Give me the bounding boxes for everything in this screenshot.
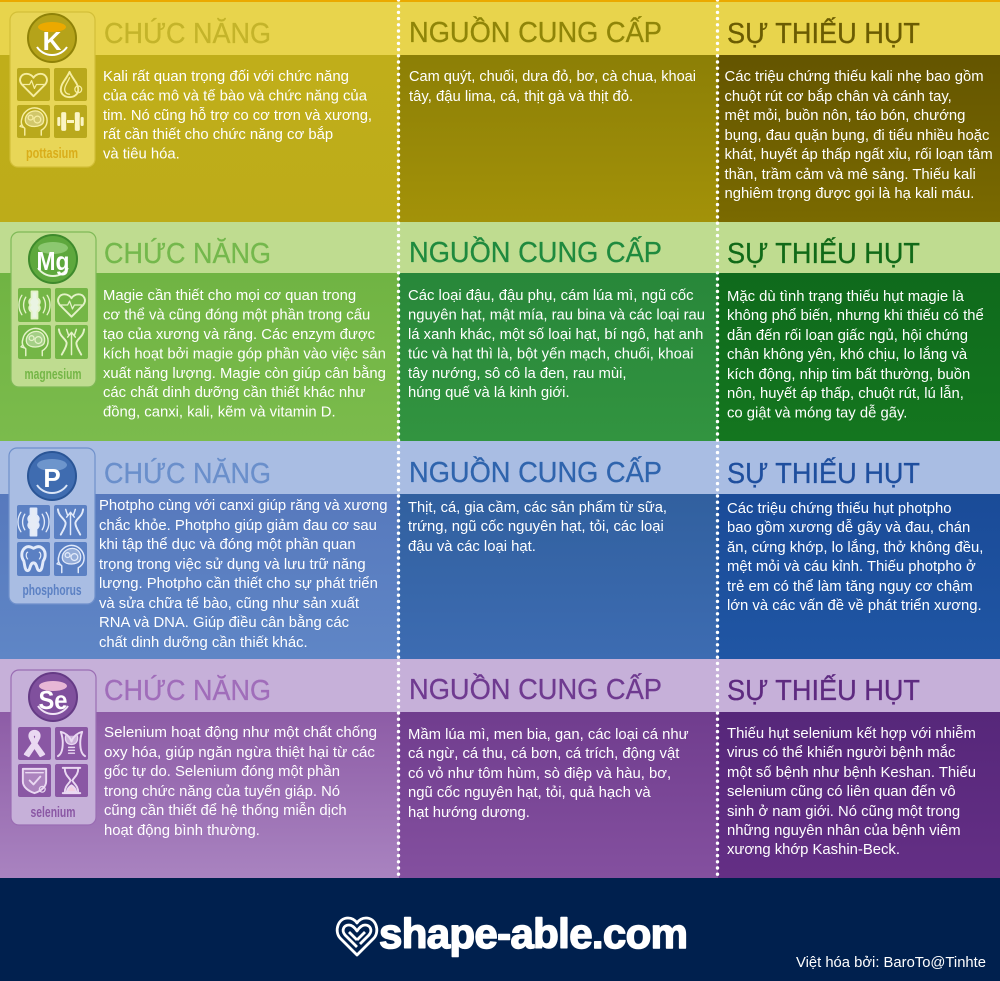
panel: magnesium row background <box>0 222 1000 441</box>
text block: phosphorus deficiency: Các triệu chứng thiếu hụt photpho <box>727 501 952 517</box>
icon: brain <box>17 105 50 138</box>
icon: drop <box>54 68 87 101</box>
footer band <box>0 878 1000 981</box>
text block: phosphorus function <box>99 498 388 651</box>
label: selenium: selenium <box>30 805 76 821</box>
text block: magnesium deficiency <box>727 289 984 422</box>
text block: magnesium deficiency: không phổ biến, nhưng khi thiếu có thể <box>727 308 984 324</box>
text block: potassium deficiency: khát, huyết áp thấp ngất xỉu, rối loạn tâm <box>724 147 993 163</box>
text block: selenium sources: hạt hướng dương. <box>408 805 530 821</box>
text block: phosphorus deficiency: trẻ em có thể làm tăng nguy cơ chậm <box>727 579 973 595</box>
icon: shape-able heart logo <box>337 918 377 955</box>
text block: selenium deficiency: selenium cũng có liên quan đến vô <box>727 784 956 800</box>
text block: magnesium function: xuất năng lượng. Magie còn giúp cân bằng <box>103 365 386 382</box>
text block: selenium deficiency: một số bệnh như bệnh Keshan. Thiếu <box>727 765 976 781</box>
icon: dumbbell <box>54 105 87 138</box>
text block: phosphorus function: chất dinh dưỡng cần thiết khác. <box>99 635 308 651</box>
panel: selenium row background <box>0 659 1000 878</box>
heading: selenium function: CHỨC NĂNG <box>104 674 271 707</box>
text block: phosphorus function: chắc khỏe. Photpho giúp giảm đau cơ sau <box>99 517 377 534</box>
text block: phosphorus function: trọng trong việc sử dụng và lưu trữ năng <box>99 557 366 573</box>
heading: magnesium deficiency: SỰ THIẾU HỤT <box>727 236 920 270</box>
text block: selenium function: oxy hóa, giúp ngăn ngừa thiệt hại từ các <box>104 745 376 761</box>
heading: selenium sources: NGUỒN CUNG CẤP <box>409 672 662 706</box>
text block: selenium sources: Mầm lúa mì, men bia, gan, các loại cá như <box>408 727 689 743</box>
text block: selenium deficiency: những nguyên nhân của bệnh viêm <box>727 823 961 839</box>
text block: potassium deficiency: chuột rút cơ bắp chân và cánh tay, <box>724 88 952 105</box>
text block: magnesium function: tạo của xương và răng. Các enzym được <box>103 327 376 343</box>
panel: phosphorus badge <box>9 448 95 604</box>
label: pottasium: pottasium <box>26 146 78 162</box>
icon: Se element circle <box>29 673 77 721</box>
heading: magnesium sources: NGUỒN CUNG CẤP <box>409 235 662 269</box>
text block: phosphorus function: khi tập thể dục và đóng một phần quan <box>99 537 356 553</box>
text block: phosphorus function: lượng. Photpho cần thiết cho sự phát triển <box>99 576 378 592</box>
text block: magnesium deficiency: Mặc dù tình trạng thiếu hụt magie là <box>727 289 965 305</box>
heading: potassium deficiency: SỰ THIẾU HỤT <box>727 16 920 50</box>
text block: selenium function: hoạt động bình thường. <box>104 823 260 839</box>
text block: magnesium function: Magie cần thiết cho mọi cơ quan trong <box>103 288 356 304</box>
icon: heart <box>55 288 88 322</box>
text block: potassium sources <box>409 69 696 105</box>
text block: potassium deficiency: nghiêm trọng được gọi là hạ kali máu. <box>724 186 974 202</box>
logo wordmark: shape-able.com <box>379 910 688 957</box>
icon: intestines <box>55 325 88 359</box>
icon: P element circle <box>28 452 76 500</box>
icon: P element circle: P <box>43 463 61 493</box>
icon: joint <box>18 288 51 322</box>
panel: phosphorus row background <box>0 441 1000 659</box>
text block: magnesium deficiency: chân không yên, khó chịu, lo lắng và <box>727 346 968 363</box>
text block: phosphorus sources: đậu và các loại hạt. <box>408 539 536 555</box>
heading: selenium deficiency: SỰ THIẾU HỤT <box>727 673 920 707</box>
icon: tooth <box>17 542 50 576</box>
text block: magnesium sources: húng quế và lá kinh giới. <box>408 385 570 401</box>
text block: magnesium sources: nguyên hạt, mật mía, rau bina và các loại rau <box>408 308 705 324</box>
text block: phosphorus deficiency: bao gồm xương dễ gãy và đau, chán <box>727 519 970 536</box>
text block: potassium deficiency: thần, trầm cảm và mê sảng. Thiếu kali <box>724 167 976 183</box>
text block: magnesium deficiency: dẫn đến rối loạn giấc ngủ, hội chứng <box>727 327 968 344</box>
icon: Se element circle: Se <box>38 685 68 715</box>
text block: magnesium sources: Các loại đậu, đậu phụ, cám lúa mì, ngũ cốc <box>408 288 694 304</box>
text block: potassium function <box>103 69 372 162</box>
heading: phosphorus deficiency: SỰ THIẾU HỤT <box>727 456 920 490</box>
text block: magnesium function <box>103 288 386 420</box>
heading: phosphorus function: CHỨC NĂNG <box>104 457 271 490</box>
text block: potassium function: của các mô và tế bào và chức năng của <box>103 88 368 104</box>
text block: potassium deficiency: Các triệu chứng thiếu kali nhẹ bao gồm <box>724 69 984 85</box>
text block: phosphorus deficiency: ăn, cứng khớp, lo lắng, thở không đều, <box>727 539 983 556</box>
text block: selenium deficiency: virus có thể khiến người bệnh mắc <box>727 744 956 761</box>
text block: selenium function: gốc tự do. Selenium đóng một phần <box>104 764 340 780</box>
label: phosphorus: phosphorus <box>22 583 82 599</box>
icon: shield <box>18 764 51 797</box>
text block: phosphorus function: RNA và DNA. Giúp điều cân bằng các <box>99 614 350 631</box>
text block: magnesium function: cơ thể và cũng đóng một phần trong cấu <box>103 308 370 324</box>
text block: potassium sources: tây, đậu lima, cá, thịt gà và thịt đỏ. <box>409 89 633 105</box>
text block: magnesium deficiency: kích động, nhịp tim bất thường, buồn <box>727 367 970 383</box>
heading: phosphorus sources: NGUỒN CUNG CẤP <box>409 455 662 489</box>
heading: potassium sources: NGUỒN CUNG CẤP <box>409 15 662 49</box>
text block: magnesium deficiency: co giật và móng tay dễ gãy. <box>727 404 907 422</box>
text block: magnesium sources: lá xanh khác, một số loại hạt, bí ngô, hạt anh <box>408 327 703 343</box>
icon: heart <box>17 68 50 101</box>
text block: magnesium sources: tây nướng, sô cô la đen, rau mùi, <box>408 366 627 382</box>
text block: magnesium function: các chất dinh dưỡng cần thiết khác như <box>103 385 365 401</box>
text block: selenium function: trong chức năng của tuyến giáp. Nó <box>104 784 340 800</box>
text block: potassium sources: Cam quýt, chuối, dưa đỏ, bơ, cà chua, khoai <box>409 69 696 85</box>
panel: selenium badge <box>11 670 96 825</box>
text block: phosphorus deficiency: lớn và các vấn đề về phát triển xương. <box>727 598 982 614</box>
text block: selenium sources <box>408 727 689 821</box>
icon: brain <box>54 542 87 576</box>
label: magnesium: magnesium <box>24 367 82 383</box>
text block: phosphorus function: và sửa chữa tế bào, cũng như sản xuất <box>99 596 360 612</box>
text block: phosphorus deficiency: mệt mỏi và cáu kỉnh. Thiếu photpho ở <box>727 559 976 575</box>
text block: selenium sources: ngũ cốc nguyên hạt, tỏi, quả hạch và <box>408 785 651 801</box>
text block: magnesium sources <box>408 288 705 401</box>
text block: potassium function: rất cần thiết cho chức năng cơ bắp <box>103 126 333 143</box>
icon: thyroid <box>55 727 88 760</box>
text block: selenium deficiency <box>727 725 976 858</box>
text block: selenium deficiency: Thiếu hụt selenium kết hợp với nhiễm <box>727 725 976 742</box>
text block: magnesium deficiency: nôn, huyết áp thấp, chuột rút, lú lẫn, <box>727 385 964 402</box>
heading: potassium function: CHỨC NĂNG <box>104 17 271 50</box>
text block: potassium function: và tiêu hóa. <box>103 146 180 162</box>
icon: brain <box>18 325 51 359</box>
text block: magnesium function: đồng, canxi, kali, kẽm và vitamin D. <box>103 404 336 420</box>
text block: potassium deficiency <box>724 69 993 202</box>
credit line: Việt hóa bởi: BaroTo@Tinhte <box>796 955 986 971</box>
text block: potassium function: tim. Nó cũng hỗ trợ co cơ trơn và xương, <box>103 107 372 124</box>
text block: phosphorus function: Photpho cùng với canxi giúp răng và xương <box>99 498 388 514</box>
text block: magnesium function: kích hoạt bởi magie góp phần vào việc sản <box>103 346 386 362</box>
icon: Mg element circle: Mg <box>36 246 70 276</box>
text block: potassium deficiency: bụng, đau quặn bụng, đi tiểu nhiều hoặc <box>724 128 990 144</box>
panel: potassium badge <box>10 12 95 167</box>
text block: phosphorus sources: trứng, ngũ cốc nguyên hạt, tỏi, các loại <box>408 519 664 535</box>
text block: magnesium sources: túc và hạt thì là, bột yến mạch, chuối, khoai <box>408 346 694 362</box>
icon: ribbon <box>18 727 51 760</box>
icon: hourglass <box>55 764 88 797</box>
panel: potassium row background <box>0 0 1000 222</box>
icon: Mg element circle <box>29 235 77 283</box>
heading: magnesium function: CHỨC NĂNG <box>104 237 271 270</box>
text block: phosphorus sources: Thịt, cá, gia cầm, các sản phẩm từ sữa, <box>408 500 667 516</box>
text block: selenium function <box>104 725 377 839</box>
text block: selenium sources: có vỏ như tôm hùm, sò điệp và hàu, bơ, <box>408 766 671 782</box>
panel: magnesium badge <box>11 232 96 387</box>
icon: K element circle <box>28 14 76 62</box>
text block: potassium deficiency: mệt mỏi, buồn nôn, táo bón, chướng <box>724 108 965 124</box>
text block: potassium function: Kali rất quan trọng đối với chức năng <box>103 69 349 85</box>
icon: joint <box>17 505 50 539</box>
text block: selenium sources: cá ngừ, cá thu, cá bơn, cá trích, động vật <box>408 746 680 762</box>
icon: intestines <box>54 505 87 539</box>
icon: K element circle: K <box>43 26 62 56</box>
text block: selenium deficiency: sinh ở nam giới. Nó cũng một trong <box>727 804 960 820</box>
text block: selenium deficiency: xương khớp Kashin-Beck. <box>727 842 900 858</box>
text block: selenium function: cũng cần thiết để hệ thống miễn dịch <box>104 802 347 819</box>
text block: selenium function: Selenium hoạt động như một chất chống <box>104 725 377 741</box>
text block: phosphorus sources <box>408 500 667 555</box>
text block: phosphorus deficiency <box>727 501 983 614</box>
